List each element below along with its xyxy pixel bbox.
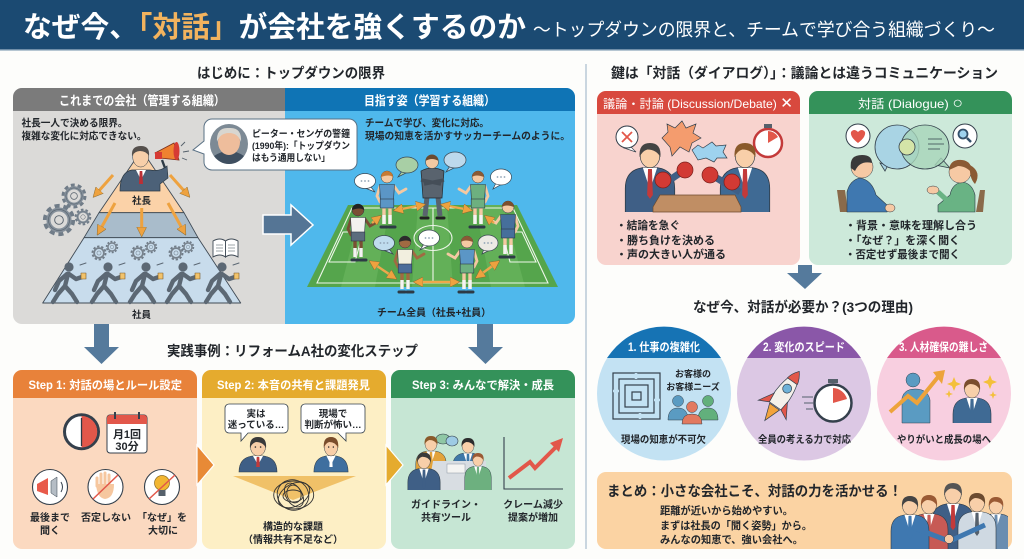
text: target description: チームで学び、変化に対応。 <box>365 116 489 130</box>
list: discussion traits: ・勝ち負けを決める <box>616 233 715 247</box>
speech bubble right <box>301 404 365 441</box>
header: step 2: Step 2: 本音の共有と課題発見 <box>217 378 370 392</box>
arrow: step 2 to step 3 <box>386 445 403 485</box>
panel: step 2 <box>202 370 386 549</box>
heading: case study: 実践事例：リフォームA社の変化ステップ <box>167 343 418 359</box>
icon: table <box>653 195 741 212</box>
icon: recruit <box>952 379 992 423</box>
text: rule labels: 大切に <box>148 524 178 537</box>
arrow: down right <box>468 324 503 364</box>
text: results <box>503 498 563 524</box>
icon: heart bubble <box>846 124 870 148</box>
header: step 3: Step 3: みんなで解決・成長 <box>412 378 554 392</box>
icon: employee woman <box>314 437 348 472</box>
arrows: top-down orders <box>97 175 186 231</box>
panel: step 1 <box>13 370 197 549</box>
text: summary lines: まずは社長の「聞く姿勢」から。 <box>660 519 812 532</box>
list: discussion traits: ・結論を急ぐ <box>616 218 680 232</box>
players <box>348 154 518 292</box>
list: dialogue traits: ・「なぜ？」を深く聞く <box>845 233 960 247</box>
icon: maze <box>613 373 660 419</box>
circle: reason 2 <box>737 326 871 460</box>
header: old company: これまでの会社（管理する組織） <box>59 93 225 108</box>
icon: calendar: 30分 <box>115 439 139 453</box>
list: discussion traits: ・声の大きい人が通る <box>616 247 726 261</box>
icon: timer <box>64 415 98 449</box>
icon: team meeting <box>408 434 492 490</box>
list: dialogue traits: ・否定せず最後まで聞く <box>845 247 960 261</box>
heading: dialogue key: 鍵は「対話（ダイアログ）」：議論とは違うコミュニケーション <box>611 65 998 81</box>
speech bubble right: 判断が怖い… <box>304 419 362 431</box>
text: reason 1 note: 現場の知恵が不可欠 <box>621 433 706 446</box>
header: target organization: 目指す姿（学習する組織） <box>364 93 495 108</box>
icon: overlapping speech bubbles <box>875 125 950 171</box>
heading: summary: まとめ：小さな会社こそ、対話の力を活かせる！ <box>607 483 902 499</box>
label: employees: 社員 <box>132 309 151 321</box>
text: summary lines: みんなの知恵で、強い会社へ。 <box>660 533 803 546</box>
circle: reason 1 <box>597 326 731 460</box>
header: dialogue: 対話 (Dialogue) ○ <box>858 95 963 112</box>
text: rule labels: 最後まで <box>30 511 70 524</box>
text: target description <box>365 116 570 142</box>
speech bubbles <box>354 152 512 254</box>
text: customer needs: お客様の <box>675 368 711 379</box>
panel: step 3 <box>391 370 575 549</box>
list: dialogue traits: ・背景・意味を理解し合う <box>845 218 977 232</box>
text: reason 3 note: やりがいと成長の場へ <box>897 433 991 446</box>
text: structural issues: （情報共有不足など） <box>243 533 343 546</box>
text: structural issues <box>243 520 343 546</box>
text: summary lines: 距離が近いから始めやすい。 <box>660 504 793 517</box>
text: guideline: 共有ツール <box>421 511 471 524</box>
icon: calendar: 月1回 <box>113 428 141 441</box>
icon: person silhouette <box>902 373 930 423</box>
icon: portrait <box>210 124 248 164</box>
text: reason 3 title: 3. 人材確保の難しさ <box>899 340 988 354</box>
label: president: 社長 <box>132 195 151 207</box>
soccer field <box>307 205 558 287</box>
text: reason 1 title: 1. 仕事の複雑化 <box>628 340 700 354</box>
speech bubble right: 現場で <box>319 408 347 420</box>
coach <box>421 154 444 218</box>
funnel <box>233 476 356 500</box>
icon: chairs <box>837 190 985 212</box>
panel: old company <box>13 88 285 324</box>
header: step 1: Step 1: 対話の場とルール設定 <box>28 378 182 392</box>
chart: growth arrow <box>504 437 563 489</box>
icon: book <box>213 239 238 257</box>
circle: reason 3 <box>877 326 1011 464</box>
icon: customers <box>668 396 718 424</box>
text: quote <box>252 128 350 164</box>
text: rule labels: 聞く <box>40 525 60 537</box>
label: whole team: チーム全員（社長+社員） <box>377 306 491 319</box>
illustration: team handshake <box>890 483 1008 549</box>
icon: employee man <box>239 437 277 472</box>
text: results: 提案が増加 <box>508 511 558 524</box>
arrow: down to reasons <box>787 265 822 289</box>
arrows: team interaction <box>372 206 495 282</box>
speech bubble left <box>225 404 288 441</box>
title banner <box>0 0 1024 50</box>
text: target description: 現場の知恵を活かすサッカーチームのように。 <box>365 130 570 142</box>
text: quote: ピーター・センゲの警鐘 <box>252 128 350 140</box>
icon: orange burst <box>662 121 701 156</box>
illustration: speaking woman <box>927 160 978 212</box>
icon: employees <box>53 262 239 302</box>
text: rule labels <box>30 511 187 537</box>
icon: anger bubble <box>616 126 638 152</box>
text: quote: はもう通用しない」 <box>252 153 330 164</box>
list: discussion traits <box>616 218 726 261</box>
arrow: down left <box>84 324 119 364</box>
callout: Peter Senge <box>193 119 357 170</box>
illustration: listening man <box>847 155 895 212</box>
speech bubble left: 実は <box>246 408 266 420</box>
text: rule labels: 「なぜ」を <box>137 511 187 524</box>
icon: tangled scribble <box>272 474 314 516</box>
text: rule labels: 否定しない <box>81 512 131 524</box>
main title: なぜ今、「対話」が会社を強くするのか <box>23 10 526 44</box>
icon: boxing gloves <box>655 162 740 190</box>
header: discussion: 議論・討論 (Discussion/Debate) ✕ <box>603 95 793 112</box>
heading: introduction: はじめに：トップダウンの限界 <box>197 65 385 81</box>
text: results: クレーム減少 <box>503 498 563 511</box>
text: quote: (1990年):「トップダウン <box>252 140 350 152</box>
text: customer needs: お客様ニーズ <box>666 381 720 392</box>
icon: megaphone rule <box>32 470 68 504</box>
icon: gears <box>45 185 90 234</box>
text: summary lines <box>660 504 812 546</box>
panel: discussion <box>597 91 800 265</box>
icon: stopwatch <box>754 124 782 157</box>
icon: rocket <box>751 362 813 430</box>
text: guideline <box>411 498 481 524</box>
text: reason 2 title: 2. 変化のスピード <box>763 340 845 354</box>
text: old company description <box>22 116 146 142</box>
text: guideline: ガイドライン・ <box>411 498 481 511</box>
panel: summary <box>597 472 1012 549</box>
icon: growth arrow <box>890 370 945 412</box>
icon: president with megaphone <box>120 142 189 191</box>
list: dialogue traits <box>845 218 977 261</box>
text: reason 2 note: 全員の考える力で対応 <box>758 433 851 446</box>
icon: speed lines <box>802 397 813 409</box>
arrow: step 1 to step 2 <box>197 445 214 485</box>
text: old company description: 社長一人で決める限界。 <box>22 116 128 130</box>
icon: small gears <box>93 242 193 259</box>
icon: stopwatch <box>814 379 852 422</box>
icon: sparkles <box>945 375 997 399</box>
arrow: old to target <box>263 205 313 245</box>
text: customer needs <box>666 368 720 392</box>
panel: dialogue <box>809 91 1012 265</box>
subtitle: ～トップダウンの限界と、チームで学び合う組織づくり～ <box>533 20 995 40</box>
heading: three reasons: なぜ今、対話が必要か？(3つの理由) <box>693 299 913 315</box>
icon: hand rule <box>88 470 123 504</box>
panel: target organization <box>285 88 575 324</box>
speech bubble left: 迷っている… <box>228 419 284 431</box>
illustration: debating men <box>624 143 770 212</box>
pyramid <box>43 150 241 303</box>
icon: blue burst <box>692 142 727 162</box>
icon: bulb rule <box>144 470 180 504</box>
icon: magnifier bubble <box>953 124 977 148</box>
text: old company description: 複雑な変化に対応できない。 <box>22 130 146 142</box>
text: structural issues: 構造的な課題 <box>263 520 323 533</box>
icon: calendar <box>107 412 147 453</box>
